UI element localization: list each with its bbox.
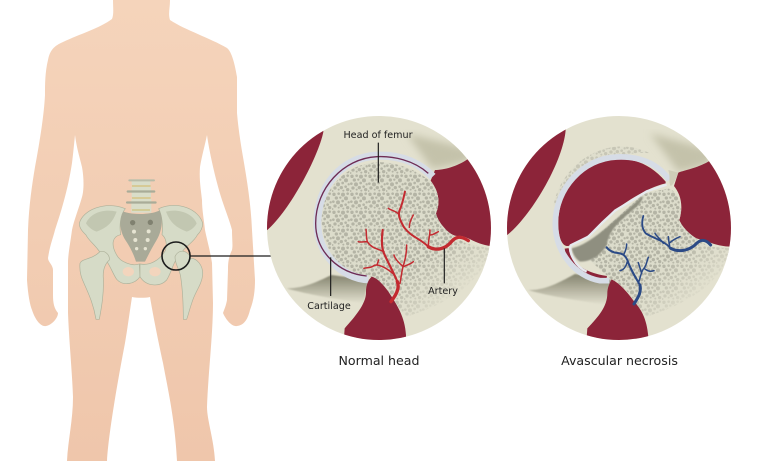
muscle right: [674, 161, 731, 247]
thin lower red strip: [567, 248, 607, 278]
label leader: cartilage: [330, 257, 332, 296]
right ilium: [140, 205, 203, 285]
necrotic red region: [558, 159, 666, 246]
body silhouette: [27, 0, 255, 461]
label: head of femur: Head of femur: [343, 130, 413, 141]
lower joint shadow: [287, 275, 368, 303]
cartilage band: [555, 157, 669, 281]
muscle top left: [267, 130, 324, 230]
muscle bottom: [344, 276, 406, 340]
upper shading: [652, 133, 709, 172]
label: cartilage: Cartilage: [307, 301, 351, 312]
label: artery: Artery: [428, 286, 458, 297]
artery upper branch: [388, 192, 468, 249]
spongy bone remnant: [580, 188, 730, 317]
vein upper branch: [642, 216, 711, 251]
fractured edge line: [570, 185, 667, 272]
muscle top left: [507, 130, 566, 235]
cartilage cap: [317, 156, 433, 279]
left femur: [80, 251, 109, 319]
label leader: head of femur: [378, 142, 379, 183]
pelvis and spine skeleton: [79, 179, 203, 319]
joint notch: [668, 170, 678, 186]
bone background: [267, 116, 491, 340]
fade of remnant: [636, 246, 729, 316]
left ilium: [79, 206, 140, 284]
vertebrae: [126, 179, 157, 213]
iliac wing shading: [86, 211, 197, 232]
connector line: [190, 255, 273, 257]
caption: normal head: Normal head: [338, 353, 420, 368]
upper shading: [407, 133, 473, 168]
label leader: artery: [444, 248, 445, 284]
vein lower branch: [607, 244, 654, 304]
muscle bottom: [586, 279, 648, 347]
femoral neck and head spongy bone: [322, 162, 490, 317]
panel: avascular necrosis: [507, 116, 731, 365]
collapsed cavity: [572, 196, 643, 262]
panel: normal head: [267, 116, 491, 365]
artery lower branch: [358, 229, 413, 302]
sacral foramina: [130, 220, 153, 250]
scattered spongy bone above cartilage: [553, 147, 650, 207]
hip magnifier ring: [162, 242, 190, 270]
obturator foramina: [123, 267, 161, 276]
right femur: [175, 251, 203, 319]
fade of spongy bone: [396, 243, 489, 316]
lower joint shadow: [528, 274, 612, 305]
sacrum: [120, 211, 162, 262]
bone background: [507, 116, 731, 340]
subchondral line: [316, 157, 428, 276]
muscle right: [430, 159, 491, 246]
caption: avascular necrosis: Avascular necrosis: [561, 353, 678, 368]
